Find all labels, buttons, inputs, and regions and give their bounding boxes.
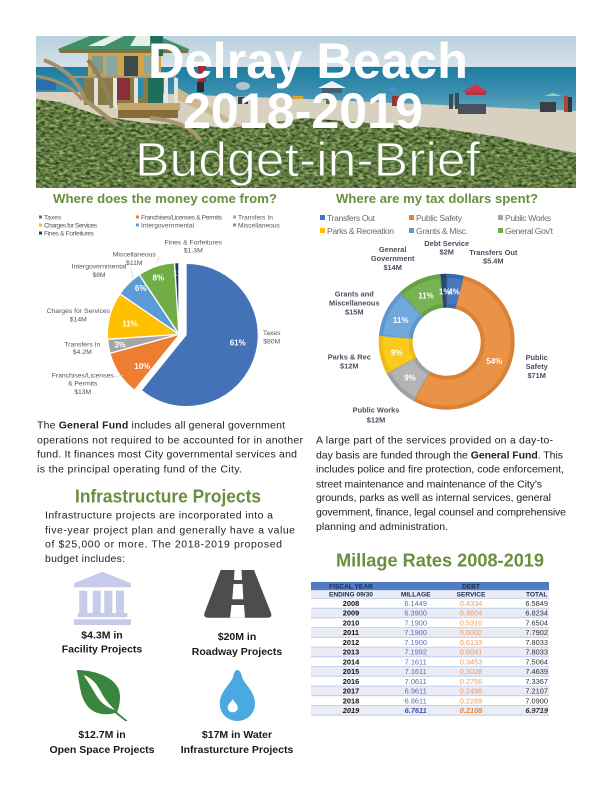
table: millage rates: 2008	[343, 599, 359, 608]
table: millage rates: 6.8611	[405, 696, 427, 705]
table: millage rates: 0.6133	[460, 638, 482, 647]
table: millage rates: 0.3028	[460, 667, 482, 676]
heading: where does the money come from: Where does the money come from?	[53, 191, 277, 206]
text block: services description: includes police and fire protection, code enforcement,	[316, 463, 564, 475]
table: millage rates: 7.4639	[525, 667, 548, 676]
pie chart: revenue sources: 1%	[173, 269, 185, 278]
table: millage rates: 7.1611	[405, 657, 427, 666]
pie chart: revenue sources: $4.2M	[73, 349, 92, 356]
table: millage rates: 2011	[343, 628, 359, 637]
table: millage rates: 7.1900	[404, 618, 427, 628]
caption: open space projects	[49, 729, 155, 756]
table: millage rates: 2010	[343, 618, 359, 628]
pie chart: revenue sources: $13M	[74, 389, 92, 396]
table: millage rates: 7.1900	[404, 628, 427, 637]
header photo: beach scene	[36, 36, 576, 190]
legend: revenue: Fines & Forfeitures	[44, 230, 95, 238]
pie chart: revenue sources: Intergovernmental	[72, 263, 127, 270]
table: millage rates: 0.2496	[460, 687, 482, 696]
pie chart: revenue sources	[47, 240, 281, 396]
table: millage rates: 6.9611	[405, 687, 427, 696]
table: millage rates: 0.6041	[460, 648, 482, 657]
donut chart: spending: 54%	[486, 357, 502, 366]
table: millage rates: 2016	[343, 677, 359, 686]
table: millage rates: 7.7902	[525, 628, 548, 637]
icon: water drop	[220, 670, 255, 721]
pie chart: revenue sources: $8M	[92, 272, 106, 279]
icon: facility building	[74, 572, 131, 625]
table: millage rates: 0.2108	[460, 706, 483, 715]
table: millage rates: 0.4334	[460, 599, 482, 608]
legend: revenue: Intergovernmental	[141, 222, 195, 230]
text block: general fund description: operations not required to be accounted for in another	[37, 434, 304, 446]
text block: general fund description: fund. It finances most City governmental services and	[37, 448, 297, 460]
legend: revenue: Taxes	[44, 214, 62, 222]
table: millage rates: 7.0611	[405, 677, 427, 686]
table: millage rates: 0.2289	[460, 696, 482, 705]
donut chart: spending: Public	[526, 353, 548, 362]
donut chart: spending: $2M	[440, 247, 454, 256]
table: millage rates: 6.8234	[525, 609, 548, 618]
caption: water infrastructure projects: Infrasturcture Projects	[181, 744, 293, 756]
table: millage rates: MILLAGE	[401, 592, 431, 599]
pie chart: revenue sources: Charges for Services	[47, 308, 111, 315]
donut chart: spending: 11%	[418, 292, 434, 301]
caption: water infrastructure projects	[181, 729, 293, 756]
table: millage rates: TOTAL	[526, 592, 547, 599]
table: millage rates: 6.1449	[404, 599, 427, 608]
donut chart: spending: Parks & Rec	[328, 352, 371, 361]
table: millage rates: 0.4604	[460, 609, 482, 618]
donut chart: spending: 9%	[391, 348, 402, 357]
text block: services description: planning and administration.	[316, 521, 448, 533]
caption: open space projects: Open Space Projects	[49, 744, 155, 756]
pie chart: revenue sources: 3%	[114, 340, 126, 350]
donut chart: spending: $14M	[383, 263, 402, 272]
table: millage rates: 2017	[343, 687, 359, 696]
legend: revenue	[39, 214, 280, 238]
legend: spending: Public Works	[505, 213, 551, 223]
legend: spending: Public Safety	[416, 213, 463, 223]
slice: taxes	[151, 300, 222, 370]
donut chart: spending: $71M	[527, 371, 546, 380]
legend: spending: Transfers Out	[327, 213, 376, 223]
caption: open space projects: $12.7M in	[78, 729, 126, 741]
table: millage rates: 2014	[343, 657, 360, 666]
text block: services description: A large part of the services provided on a day-to-	[316, 434, 554, 446]
pie chart: revenue sources: $80M	[263, 338, 281, 345]
pie chart: revenue sources: 11%	[122, 320, 138, 328]
donut chart: spending: Debt Service	[424, 239, 469, 248]
title: Budget-in-Brief: Budget-in-Brief	[135, 134, 481, 187]
legend: revenue: Transfers In	[238, 214, 273, 222]
text block: services description: street maintenance and maintenance of the City's	[316, 478, 542, 490]
table: millage rates: 0.5316	[460, 618, 482, 628]
caption: facility projects: $4.3M in	[81, 630, 123, 642]
table: millage rates: 2019	[342, 706, 360, 715]
legend: revenue: Charges for Services	[44, 222, 98, 230]
text block: infrastructure description: five-year project plan and generally have a value	[45, 524, 295, 536]
table: millage rates: 6.3900	[404, 609, 427, 618]
donut chart: spending: $15M	[345, 307, 364, 316]
table: millage rates: 7.8033	[525, 638, 548, 647]
caption: roadway projects: $20M in	[218, 631, 256, 643]
legend: spending: General Gov't	[505, 226, 554, 236]
pie chart: revenue sources: 6%	[135, 284, 146, 293]
donut chart: spending: General	[379, 245, 406, 254]
pie chart: revenue sources: 8%	[153, 274, 164, 282]
table: millage rates: 2018	[343, 696, 359, 705]
caption: roadway projects: Roadway Projects	[192, 646, 282, 658]
text block: general fund description	[37, 419, 304, 475]
icon: leaf	[77, 670, 128, 721]
table: millage rates	[311, 582, 549, 715]
pie chart: revenue sources: & Permits	[68, 381, 98, 388]
pie chart: revenue sources: Taxes	[263, 330, 281, 337]
pie chart: revenue sources: Fines & Forfeitures	[165, 240, 223, 247]
table: millage rates: DEBT	[462, 584, 480, 590]
caption: roadway projects	[192, 631, 282, 658]
table: millage rates: SERVICE	[457, 592, 486, 599]
donut chart: spending: $12M	[340, 361, 359, 370]
heading: millage rates: Millage Rates 2008-2019	[336, 551, 544, 571]
pie chart: revenue sources: $1.3M	[184, 248, 203, 255]
pie chart: revenue sources: Franchises/Licenses	[52, 373, 114, 380]
table: millage rates: 7.3367	[525, 677, 548, 686]
table: millage rates: 2013	[343, 648, 359, 657]
legend: revenue: Franchises/Licenses & Permits	[141, 214, 223, 222]
donut chart: spending: Miscellaneous	[329, 298, 380, 307]
table: millage rates: 7.5064	[525, 657, 548, 666]
donut chart: spending: 11%	[393, 316, 408, 325]
text block: services description	[316, 434, 566, 533]
caption: water infrastructure projects: $17M in Water	[202, 729, 272, 741]
title: 2018-2019: 2018-2019	[183, 83, 423, 139]
legend: spending: Grants & Misc.	[416, 226, 468, 236]
table: millage rates: 7.8033	[525, 648, 548, 657]
table: millage rates: 6.5849	[525, 599, 548, 608]
pie chart: revenue sources: $11M	[126, 260, 143, 267]
donut chart: spending: 9%	[404, 374, 416, 383]
donut chart: spending: 4%	[448, 288, 460, 297]
donut chart: spending: Transfers Out	[469, 248, 518, 257]
pie chart: revenue sources: 10%	[134, 362, 150, 371]
text block: infrastructure description: of $25,000 or more. The 2018-2019 proposed	[45, 538, 282, 550]
pie chart: revenue sources: Miscellaneous	[113, 252, 156, 259]
donut chart: spending: Public Works	[353, 406, 399, 415]
heading: infrastructure projects: Infrastructure Projects	[75, 486, 261, 506]
text block: services description: government, finance, legal counsel and comprehensive	[316, 507, 566, 519]
caption: facility projects	[62, 630, 142, 656]
icon: road	[204, 570, 271, 618]
table: millage rates: 7.1611	[405, 667, 427, 676]
legend: revenue: Miscellaneous	[238, 222, 280, 230]
heading: where are my tax dollars spent: Where are my tax dollars spent?	[336, 191, 538, 206]
donut chart: spending: $12M	[367, 416, 385, 425]
text block: infrastructure description	[45, 509, 295, 565]
table: millage rates: 7.2107	[525, 687, 548, 696]
pie chart: revenue sources: 61%	[230, 338, 246, 348]
title: Delray Beach: Delray Beach	[148, 33, 468, 89]
text block: infrastructure description: Infrastructure projects are incorporated into a	[45, 509, 273, 521]
pie chart: revenue sources: Transfers In	[64, 341, 101, 348]
donut chart: spending	[328, 239, 549, 425]
table: millage rates: 2012	[343, 638, 359, 647]
table: millage rates: 7.6504	[525, 618, 548, 628]
table: millage rates: 6.7611	[405, 706, 427, 715]
text block: services description: day basis are funded through the General Fund. This	[316, 449, 563, 461]
text block: general fund description: is the principal operating fund of the City.	[37, 463, 242, 475]
table: millage rates: 7.1992	[404, 648, 427, 657]
legend: spending	[320, 213, 554, 236]
table: millage rates: 0.3453	[460, 657, 482, 666]
legend: spending: Parks & Recreation	[327, 226, 394, 236]
donut chart: spending: Safety	[526, 362, 549, 371]
table: millage rates: 0.6002	[460, 628, 482, 637]
text block: infrastructure description: budget includes:	[45, 553, 125, 565]
donut chart: spending: Government	[371, 254, 415, 263]
table: millage rates: 6.9719	[525, 706, 549, 715]
donut chart: spending: 1%	[439, 288, 450, 297]
text block: services description: grounds, parks as well as internal services, general	[316, 492, 551, 504]
pie chart: revenue sources: $14M	[70, 316, 87, 324]
table: millage rates: ENDING 09/30	[329, 592, 373, 599]
donut chart: spending: Grants and	[335, 289, 374, 298]
donut chart: spending: $5.4M	[483, 257, 504, 266]
caption: facility projects: Facility Projects	[62, 644, 142, 656]
slice: other revenue sources	[144, 299, 214, 370]
table: millage rates: 2015	[343, 667, 359, 676]
table: millage rates: 7.1900	[404, 638, 427, 647]
text block: general fund description: The General Fund includes all general government	[37, 419, 285, 431]
table: millage rates: 2009	[343, 609, 359, 618]
table: millage rates: 7.0900	[525, 696, 548, 705]
table: millage rates: 0.2756	[460, 677, 482, 686]
table: millage rates: FISCAL YEAR	[329, 584, 373, 590]
